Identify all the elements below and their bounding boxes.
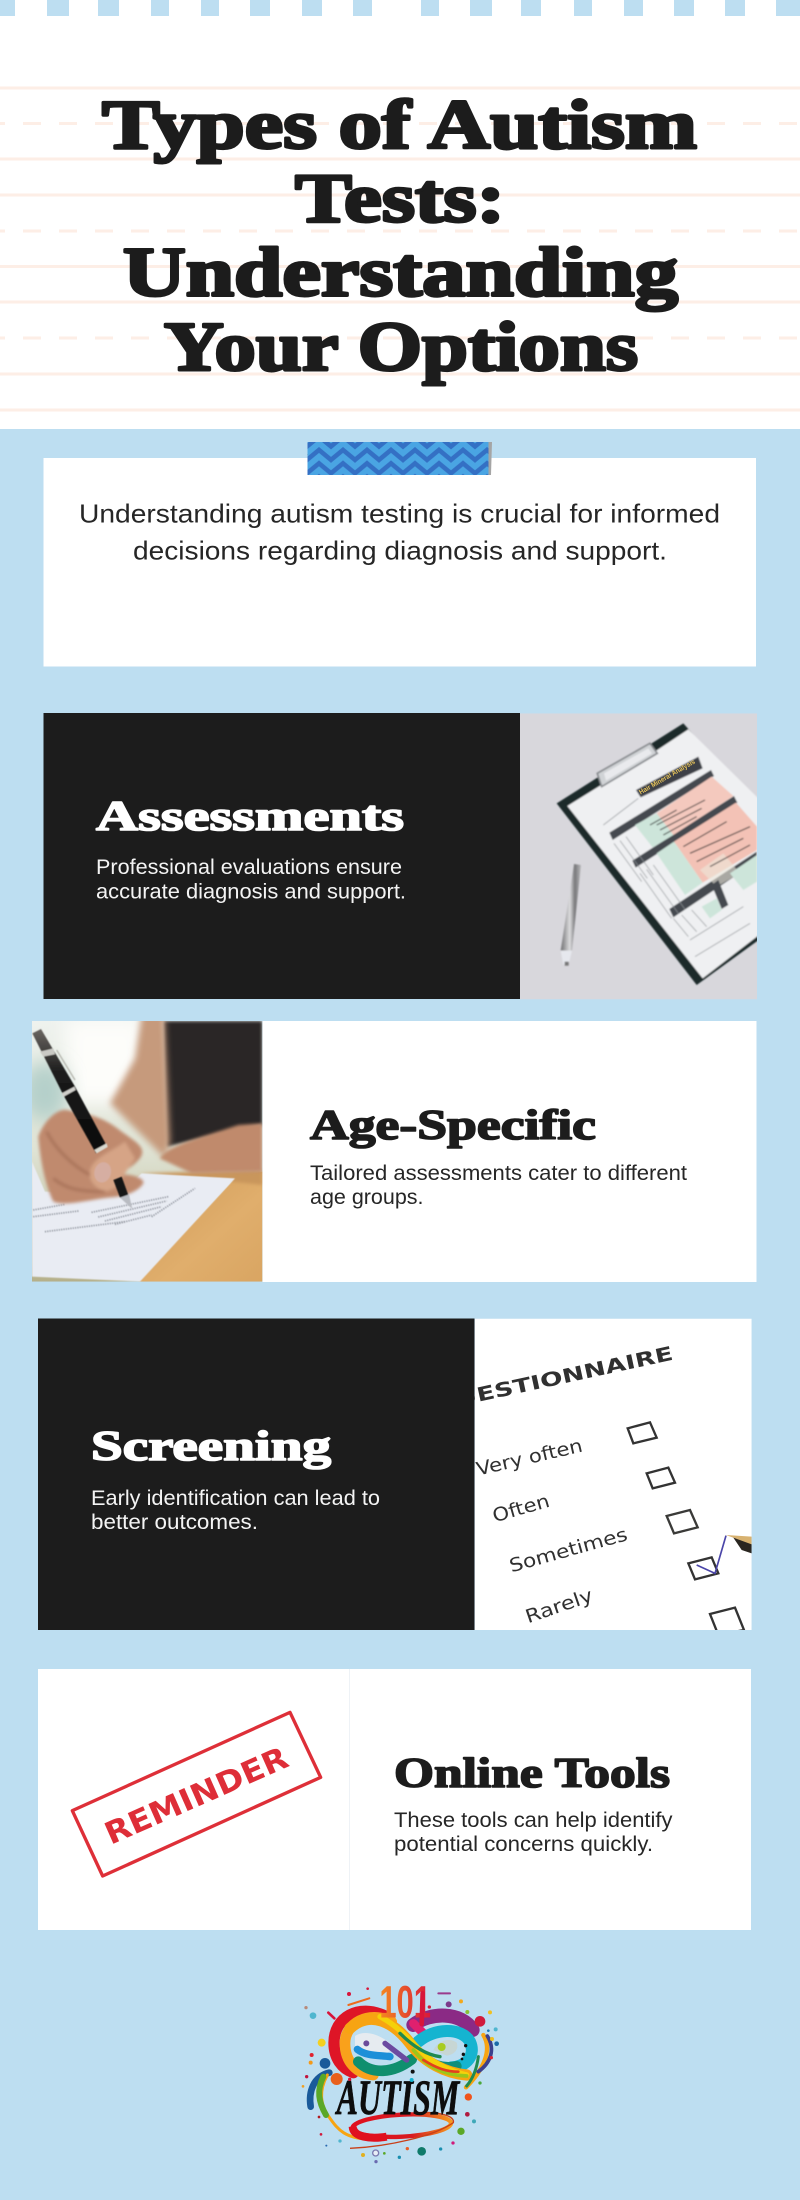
ring (350, 2112, 453, 2148)
title (102, 87, 697, 386)
logo text: 101: 101 (379, 1976, 431, 2027)
confetti dots (302, 1987, 499, 2163)
body: Screening (91, 1487, 380, 1534)
photo: questionnaire: Very often (474, 1436, 585, 1481)
photo: hand writing with a pen (22, 1015, 262, 1282)
intro text: decisions regarding diagnosis and support. (133, 536, 667, 566)
intro text: Understanding autism testing is crucial for informed (79, 498, 720, 528)
panel: Assessments (44, 713, 763, 999)
photo: questionnaire: Often (490, 1491, 552, 1527)
body: Assessments (96, 856, 406, 904)
logo: 101 Autism (302, 1976, 499, 2163)
heading: Assessments: Assessments (96, 794, 404, 840)
body: Online Tools (394, 1809, 673, 1856)
stamp: reminder: REMINDER (100, 1741, 294, 1852)
title: Understanding (123, 234, 678, 312)
infinity symbol (334, 2011, 473, 2076)
body: Screening: better outcomes. (91, 1511, 258, 1534)
panel: Age-Specific (22, 1015, 757, 1282)
body: Age-Specific (310, 1162, 687, 1209)
body: Assessments: Professional evaluations ensure (96, 856, 402, 879)
title: Tests: (295, 160, 505, 238)
photo: questionnaire: Rarely (523, 1585, 596, 1628)
heading: Screening: Screening (91, 1424, 331, 1470)
heading: Age-Specific: Age-Specific (310, 1103, 596, 1149)
panel: introduction (44, 458, 756, 666)
washi tape (307, 442, 492, 475)
title: Types of Autism (102, 87, 697, 164)
intro text (79, 498, 720, 566)
body: Age-Specific: age groups. (310, 1186, 424, 1209)
top perforated stripe (0, 0, 800, 16)
body: Screening: Early identification can lead to (91, 1487, 380, 1510)
decorative swooshes (310, 1993, 491, 2139)
notebook ruled lines (0, 88, 800, 410)
photo label: Hair Mineral Analysis (638, 759, 697, 796)
body: Online Tools: These tools can help identify (394, 1809, 673, 1832)
photo: questionnaire (454, 1319, 752, 1635)
photo: clipboard and pen (520, 713, 763, 999)
panel: Screening (38, 1318, 752, 1635)
panel: Online Tools (38, 1669, 751, 1930)
stamp: reminder (72, 1712, 321, 1876)
heading: Online Tools: Online Tools (394, 1751, 670, 1797)
body: Assessments: accurate diagnosis and support. (96, 880, 406, 904)
photo: questionnaire: UESTIONNAIRE (454, 1342, 675, 1411)
photo: questionnaire: Sometimes (507, 1524, 630, 1577)
title: Your Options (164, 309, 638, 386)
logo text: Autism: AUTISM (335, 2070, 461, 2125)
body: Online Tools: potential concerns quickly. (394, 1833, 653, 1856)
body: Age-Specific: Tailored assessments cater to different (310, 1162, 687, 1185)
